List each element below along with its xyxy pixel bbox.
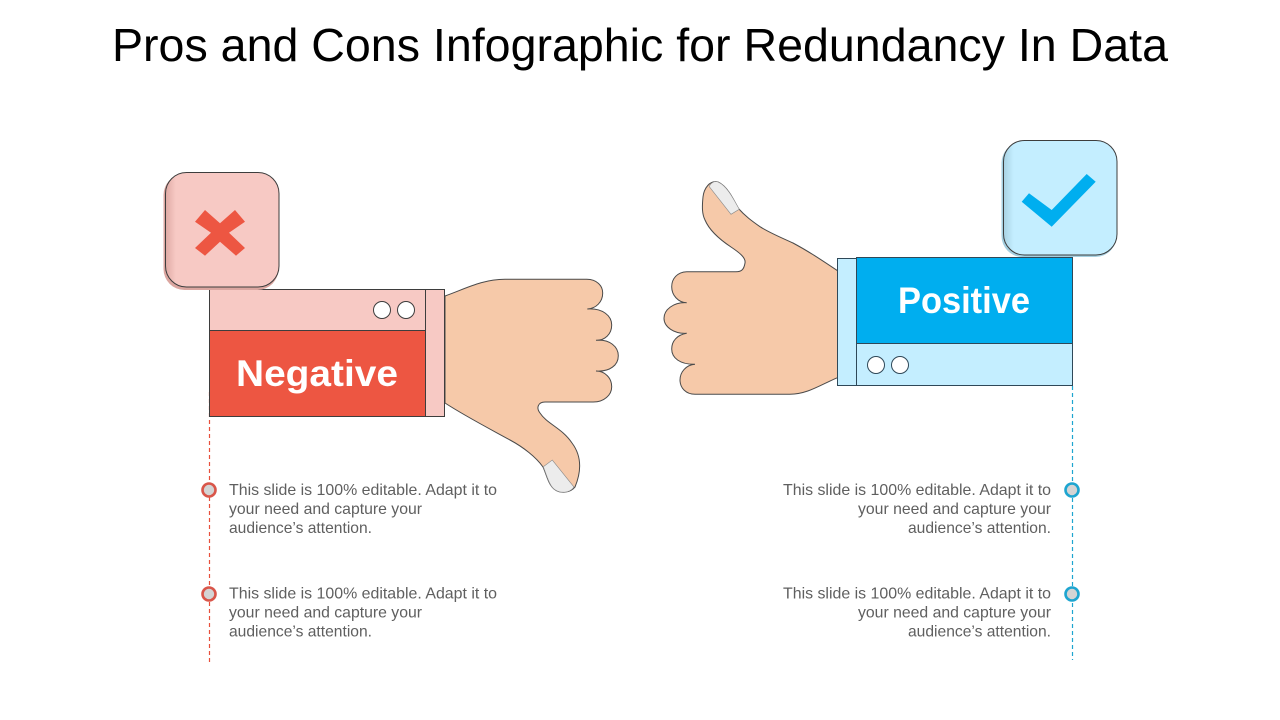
icon: cross badge [164,172,279,290]
text: negative 1: audience’s attention. [229,520,372,537]
text: positive 2: This slide is 100% editable. Adapt it to [783,586,1051,602]
marker: negative 1 [202,484,216,496]
text: positive 2: your need and capture your [858,604,1052,622]
hand: thumbs up [664,182,838,394]
text: positive 1 [783,482,1052,537]
marker: negative 2 [202,588,216,600]
dashed timeline: negative [208,392,210,662]
marker: positive 2 [1066,588,1078,600]
title: Pros and Cons Infographic for Redundancy In Data [112,19,1168,71]
text: negative 2 [229,586,497,640]
text: positive 1: your need and capture your [858,501,1052,518]
text: positive 1: This slide is 100% editable. Adapt it to [783,482,1051,499]
text: positive 2: audience’s attention. [908,624,1051,640]
sleeve: negative [210,290,444,416]
text: negative 2: This slide is 100% editable. Adapt it to [229,586,497,602]
text: negative 1: your need and capture your [229,501,423,518]
text: positive 2 [783,586,1052,640]
thumbnail: thumbs up [709,182,739,214]
text: negative 2: your need and capture your [229,604,423,622]
thumbnail: thumbs down [543,460,574,492]
icon: check badge [1002,140,1117,257]
hand: thumbs down [445,279,618,492]
panel: positive side [664,140,1117,660]
text: negative 1 [229,482,497,537]
dashed timeline: positive [1072,386,1074,660]
text: negative 1: This slide is 100% editable. Adapt it to [229,482,497,499]
text: negative 2: audience’s attention. [229,624,372,640]
panel: negative side [164,172,618,662]
label: Positive: Positive [898,280,1030,321]
sleeve: positive [838,258,1072,386]
marker: positive 1 [1066,484,1078,496]
text: positive 1: audience’s attention. [908,520,1051,537]
label: Negative: Negative [236,353,398,394]
